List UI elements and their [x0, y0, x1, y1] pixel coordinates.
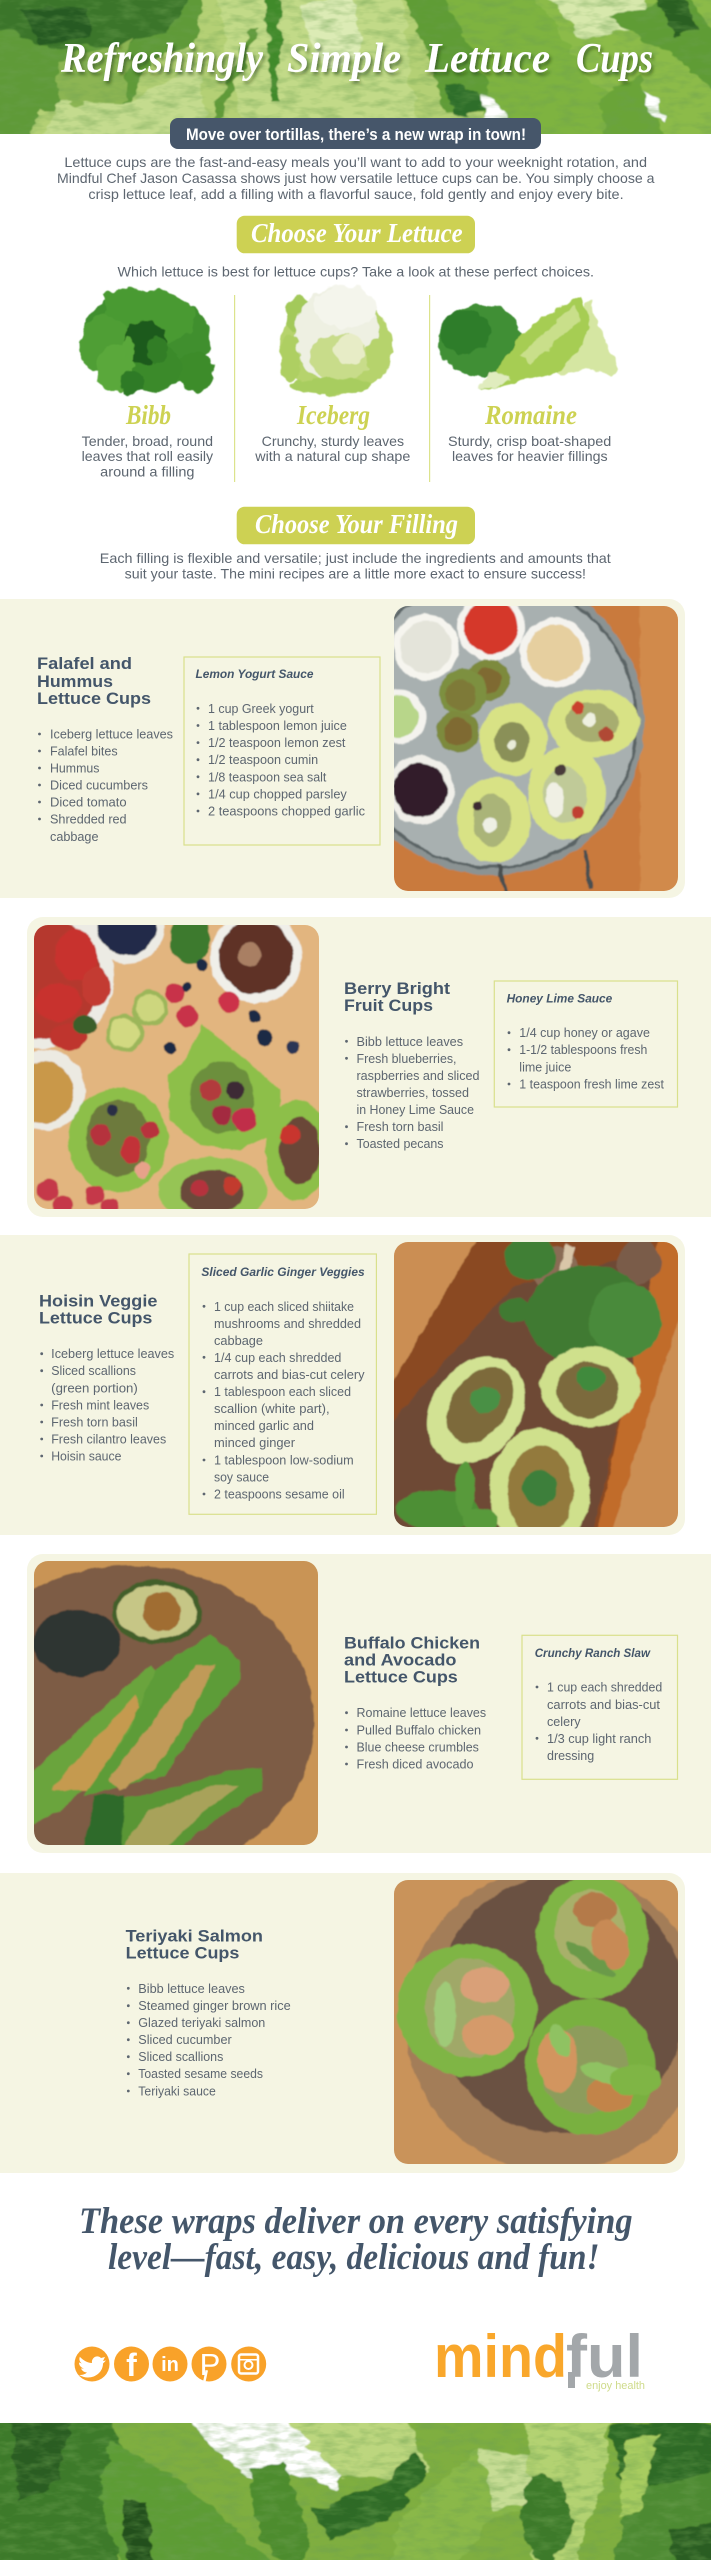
- sauce box: lemon yogurt sauce: 1 cup Greek yogurt: [208, 702, 314, 716]
- sauce box: sliced garlic ginger veggies: scallion (white part),: [214, 1402, 330, 1416]
- ingredient list: Teriyaki sauce: [138, 2084, 216, 2098]
- recipe title: [344, 979, 450, 1015]
- icon: linkedin: in: [161, 2354, 179, 2376]
- label: Bibb: Bibb: [125, 400, 171, 430]
- icon: pinterest: [192, 2346, 226, 2382]
- intro paragraph: Lettuce cups are the fast-and-easy meals you’ll want to add to your weeknight rotation, and: [64, 154, 647, 170]
- ingredient list: Bibb lettuce leaves: [356, 1035, 463, 1049]
- ingredient list: Diced tomato: [50, 796, 127, 810]
- icon: instagram: [231, 2346, 266, 2382]
- panel: romaine lettuce: [438, 296, 618, 464]
- sauce box: lemon yogurt sauce: 1 tablespoon lemon juice: [208, 719, 347, 733]
- intro paragraph: Mindful Chef Jason Casassa shows just how versatile lettuce cups can be. You simply choose a: [57, 170, 655, 186]
- panel background: [27, 1554, 711, 1853]
- photo: hoisin veggie tray: [394, 1242, 678, 1527]
- ingredient list: raspberries and sliced: [356, 1069, 480, 1083]
- main title: Lettuce: [424, 36, 550, 82]
- iceberg description: Crunchy, sturdy leaves: [262, 433, 404, 449]
- heading: choose your lettuce: Choose Your Lettuce: [251, 218, 463, 248]
- ingredient list: Fresh torn basil: [356, 1120, 444, 1134]
- ingredient list: Diced cucumbers: [50, 778, 148, 792]
- ingredient list: Blue cheese crumbles: [356, 1740, 479, 1754]
- recipe title: Buffalo Chicken: [344, 1633, 480, 1652]
- panel: bibb lettuce: [80, 287, 214, 480]
- logo: mindful: mind: [434, 2323, 567, 2390]
- recipe title: [37, 654, 151, 708]
- sauce box: lemon yogurt sauce: 1/8 teaspoon sea salt: [208, 770, 327, 784]
- divider: [234, 295, 235, 482]
- logo: mindful: ful: [566, 2323, 643, 2390]
- ingredient list: Shredded red: [50, 812, 127, 826]
- romaine description: leaves for heavier fillings: [452, 448, 608, 464]
- lettuce question text: Which lettuce is best for lettuce cups? Take a look at these perfect choices.: [118, 264, 594, 280]
- icon: bibb lettuce head: [80, 287, 214, 395]
- sauce box: honey lime sauce: 1/4 cup honey or agave: [519, 1026, 650, 1040]
- sauce box: honey lime sauce: Honey Lime Sauce: [507, 992, 613, 1006]
- recipe title: Lettuce Cups: [37, 689, 151, 708]
- sauce box: lemon yogurt sauce: 2 teaspoons chopped garlic: [208, 804, 365, 818]
- ingredient list: strawberries, tossed: [356, 1086, 469, 1100]
- panel background: [0, 1235, 685, 1535]
- ingredient list: Fresh cilantro leaves: [51, 1432, 166, 1446]
- logo: mindful: enjoy health: [586, 2380, 645, 2392]
- icon: facebook: f: [126, 2347, 137, 2383]
- social media icons: [74, 2346, 266, 2383]
- iceberg description: with a natural cup shape: [254, 448, 411, 464]
- sauce box: sliced garlic ginger veggies: Sliced Garlic Ginger Veggies: [201, 1265, 365, 1279]
- icon: romaine lettuce head: [438, 296, 618, 390]
- subtitle pill: [170, 118, 541, 149]
- panel background: [0, 599, 685, 898]
- ingredient list: (green portion): [51, 1382, 138, 1396]
- filling intro text: [100, 550, 611, 582]
- ingredient list: Sliced cucumber: [138, 2033, 232, 2047]
- panel background: [27, 917, 711, 1217]
- sauce box: sliced garlic ginger veggies: 1 tablespoon each sliced: [214, 1385, 351, 1399]
- sauce box: sliced garlic ginger veggies: soy sauce: [214, 1470, 269, 1484]
- ingredient list: [345, 1706, 486, 1772]
- ingredient list: [345, 1035, 480, 1151]
- bibb description: [82, 433, 213, 480]
- ingredient list: [40, 1347, 174, 1464]
- ingredient list: [38, 728, 173, 844]
- ingredient list: Fresh torn basil: [51, 1416, 138, 1430]
- ingredient list: Sliced scallions: [138, 2050, 223, 2064]
- label: Iceberg: Iceberg: [296, 400, 370, 430]
- recipe title: [126, 1926, 263, 1963]
- sauce box: lemon yogurt sauce: 1/2 teaspoon cumin: [208, 753, 318, 767]
- filling intro text: Each filling is flexible and versatile; just include the ingredients and amounts that: [100, 550, 611, 566]
- heading: choose your filling: Choose Your Filling: [255, 509, 458, 539]
- ingredient list: Iceberg lettuce leaves: [50, 728, 173, 742]
- recipe title: and Avocado: [344, 1651, 456, 1670]
- closing statement: [79, 2201, 633, 2278]
- iceberg description: [254, 433, 411, 464]
- sauce box: sliced garlic ginger veggies: minced garlic and: [214, 1419, 314, 1433]
- sauce box: honey lime sauce: [494, 981, 678, 1107]
- subtitle pill: Move over tortillas, there’s a new wrap in town!: [186, 125, 526, 144]
- ingredient list: in Honey Lime Sauce: [356, 1103, 474, 1117]
- ingredient list: Fresh mint leaves: [51, 1398, 149, 1412]
- main title: Simple: [287, 36, 401, 82]
- sauce box: lemon yogurt sauce: 1/4 cup chopped parsley: [208, 787, 348, 801]
- icon: pinterest: P: [200, 2347, 220, 2382]
- ingredient list: Bibb lettuce leaves: [138, 1982, 245, 1996]
- sauce box: crunchy ranch slaw: Crunchy Ranch Slaw: [535, 1646, 651, 1660]
- ingredient list: cabbage: [50, 830, 99, 844]
- main title: Refreshingly: [60, 36, 263, 82]
- recipe title: Hoisin Veggie: [39, 1292, 157, 1311]
- sauce box: crunchy ranch slaw: 1 cup each shredded: [547, 1680, 662, 1694]
- panel: teriyaki salmon lettuce cups: [0, 1868, 705, 2174]
- logo: mindful: [434, 2323, 645, 2392]
- sauce box: lemon yogurt sauce: [184, 657, 380, 845]
- sauce box: sliced garlic ginger veggies: [189, 1254, 376, 1514]
- sauce box: honey lime sauce: 1-1/2 tablespoons fresh: [519, 1043, 647, 1057]
- panel: iceberg lettuce: [254, 286, 411, 464]
- main title: Cups: [576, 36, 653, 82]
- icon: twitter: [74, 2346, 110, 2382]
- recipe title: Fruit Cups: [344, 996, 433, 1015]
- sauce box: sliced garlic ginger veggies: mushrooms and shredded: [214, 1317, 361, 1331]
- recipe title: Lettuce Cups: [344, 1668, 458, 1687]
- bibb description: leaves that roll easily: [82, 448, 213, 464]
- footer watercolor banner: [0, 2423, 711, 2560]
- sauce box: crunchy ranch slaw: celery: [547, 1715, 581, 1729]
- ingredient list: Toasted pecans: [356, 1137, 444, 1151]
- closing statement: level—fast, easy, delicious and fun!: [108, 2237, 600, 2278]
- panel: buffalo chicken and avocado lettuce cups: [27, 1554, 711, 1853]
- sauce box: lemon yogurt sauce: 1/2 teaspoon lemon zest: [208, 736, 346, 750]
- intro paragraph: crisp lettuce leaf, add a filling with a flavorful sauce, fold gently and enjoy every bite.: [88, 186, 624, 202]
- panel: berry bright fruit cups: [27, 917, 711, 1217]
- bibb description: around a filling: [100, 464, 194, 480]
- ingredient list: Fresh diced avocado: [356, 1758, 474, 1772]
- romaine description: [448, 433, 611, 464]
- recipe title: [344, 1633, 480, 1687]
- ingredient list: Romaine lettuce leaves: [356, 1706, 486, 1720]
- ingredient list: Hummus: [50, 762, 99, 776]
- recipe title: Lettuce Cups: [39, 1309, 152, 1328]
- panel: hoisin veggie lettuce cups: [0, 1232, 688, 1552]
- sauce box: lemon yogurt sauce: Lemon Yogurt Sauce: [196, 667, 314, 681]
- sauce box: sliced garlic ginger veggies: minced ginger: [214, 1436, 295, 1450]
- ingredient list: [127, 1982, 291, 2098]
- recipe title: [39, 1292, 157, 1328]
- ingredient list: Glazed teriyaki salmon: [138, 2016, 265, 2030]
- icon: linkedin: [152, 2346, 188, 2382]
- sauce box: sliced garlic ginger veggies: 2 teaspoons sesame oil: [214, 1488, 345, 1502]
- sauce box: crunchy ranch slaw: 1/3 cup light ranch: [547, 1732, 651, 1746]
- sauce box: sliced garlic ginger veggies: 1/4 cup each shredded: [214, 1351, 341, 1365]
- photo: falafel tray: [394, 606, 678, 891]
- ingredient list: Iceberg lettuce leaves: [51, 1347, 174, 1361]
- divider: [429, 295, 430, 482]
- bibb description: Tender, broad, round: [82, 433, 213, 449]
- ingredient list: Hoisin sauce: [51, 1450, 122, 1464]
- recipe title: Falafel and: [37, 654, 132, 673]
- photo: teriyaki salmon cups: [394, 1880, 678, 2164]
- panel background: [0, 1873, 685, 2173]
- main title: [60, 36, 653, 82]
- recipe title: Lettuce Cups: [126, 1944, 239, 1963]
- sauce box: honey lime sauce: lime juice: [519, 1060, 571, 1074]
- photo: berries and lettuce: [34, 925, 319, 1209]
- header watercolor banner: [0, 0, 711, 134]
- sauce box: honey lime sauce: 1 teaspoon fresh lime zest: [519, 1078, 664, 1092]
- romaine description: Sturdy, crisp boat-shaped: [448, 433, 611, 449]
- recipe title: Teriyaki Salmon: [126, 1926, 263, 1945]
- ingredient list: Pulled Buffalo chicken: [356, 1724, 481, 1738]
- photo: buffalo chicken on wood board: [34, 1561, 318, 1845]
- filling intro text: suit your taste. The mini recipes are a little more exact to ensure success!: [125, 566, 586, 582]
- ingredient list: Sliced scallions: [51, 1364, 136, 1378]
- sauce box: sliced garlic ginger veggies: carrots and bias-cut celery: [214, 1368, 365, 1382]
- panel: falafel and hummus lettuce cups: [0, 571, 688, 901]
- recipe title: Berry Bright: [344, 979, 450, 998]
- sauce box: crunchy ranch slaw: dressing: [547, 1749, 594, 1763]
- sauce box: sliced garlic ginger veggies: 1 tablespoon low-sodium: [214, 1454, 354, 1468]
- label: Romaine: Romaine: [484, 400, 577, 430]
- sauce box: crunchy ranch slaw: [522, 1635, 678, 1779]
- ingredient list: Toasted sesame seeds: [138, 2067, 263, 2081]
- ingredient list: Steamed ginger brown rice: [138, 1999, 291, 2013]
- recipe title: Hummus: [37, 672, 113, 691]
- sauce box: sliced garlic ginger veggies: 1 cup each sliced shiitake: [214, 1300, 354, 1314]
- sauce box: crunchy ranch slaw: carrots and bias-cut: [547, 1698, 661, 1712]
- sauce box: sliced garlic ginger veggies: cabbage: [214, 1334, 263, 1348]
- ingredient list: Fresh blueberries,: [356, 1052, 456, 1066]
- closing statement: These wraps deliver on every satisfying: [79, 2201, 633, 2242]
- ingredient list: Falafel bites: [50, 744, 118, 758]
- icon: facebook: [114, 2346, 149, 2383]
- intro paragraph: [57, 154, 655, 202]
- icon: iceberg lettuce head: [280, 286, 392, 395]
